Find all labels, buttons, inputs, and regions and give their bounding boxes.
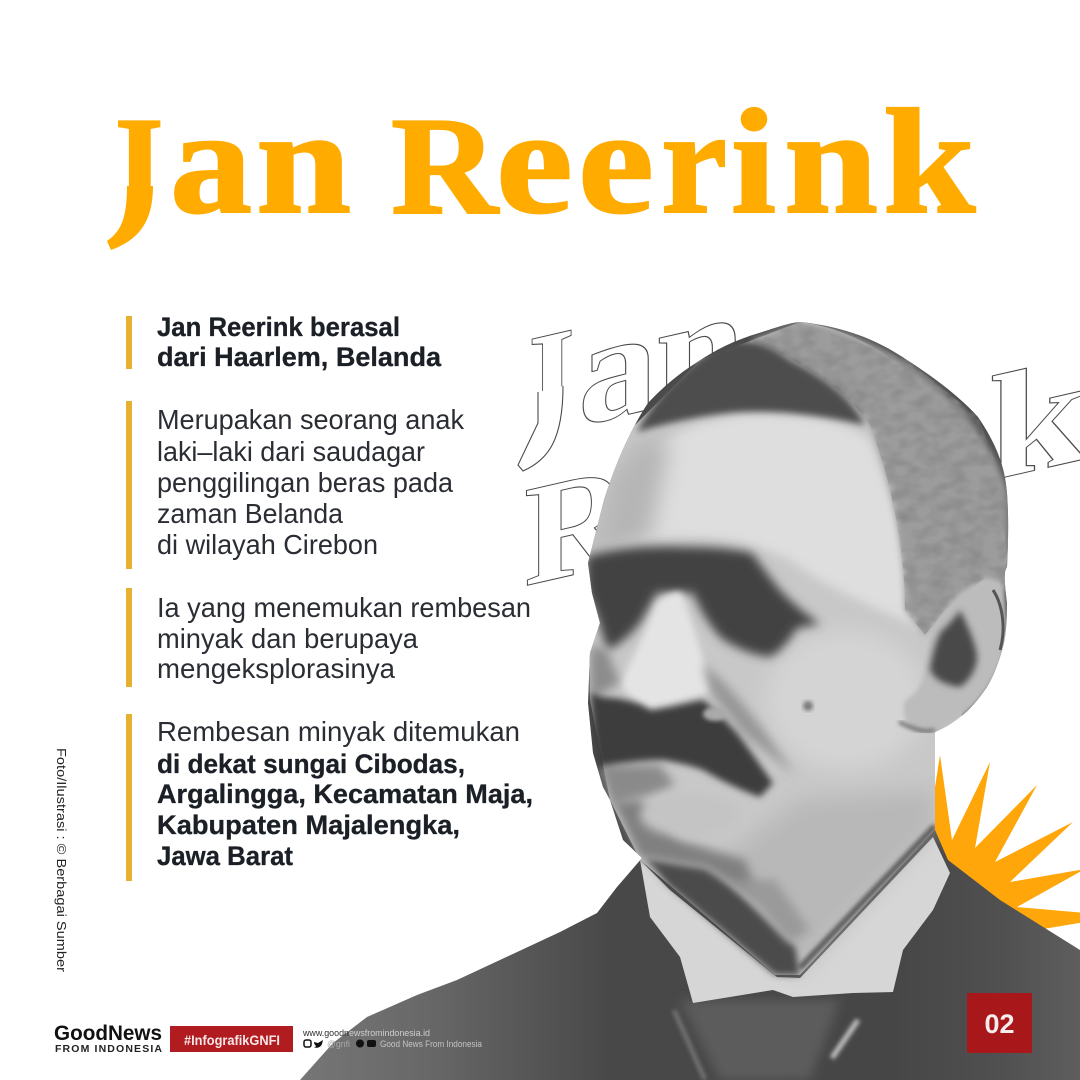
left cheek edge: [590, 645, 620, 700]
logo: FROM INDONESIA: [55, 1043, 162, 1055]
title: [107, 106, 976, 250]
bullet: location: Argalingga, Kecamatan Maja,: [157, 779, 533, 809]
neck: [720, 790, 935, 972]
outlined title behind portrait: a: [578, 275, 658, 459]
photo credit: Foto/Ilustrasi : © Berbagai Sumber: [54, 748, 69, 973]
website and social handles: @gnfi: [327, 1039, 350, 1049]
bullet: location: Kabupaten Majalengka,: [157, 810, 460, 840]
icon: orange sunburst: [933, 755, 1080, 930]
collar: [640, 837, 950, 1003]
logo: [54, 1022, 162, 1055]
outlined title behind portrait: J: [512, 295, 575, 475]
bullet: family background: zaman Belanda: [157, 498, 343, 529]
dark hairline: [637, 341, 865, 432]
outlined title behind portrait: n: [655, 255, 745, 441]
bullet: family background: penggilingan beras pada: [157, 467, 453, 498]
bullet: discovery: [126, 588, 531, 687]
title: R: [391, 90, 500, 244]
footer: [54, 1022, 482, 1055]
title: i: [731, 78, 776, 245]
title: e: [496, 80, 573, 245]
bullet: location: [126, 714, 533, 881]
hashtag badge: [170, 1026, 293, 1052]
chin highlight: [636, 803, 683, 841]
title: n: [784, 79, 878, 245]
face base: [588, 322, 1007, 975]
nostril and cheek shadow: [703, 665, 795, 775]
title: k: [883, 79, 975, 245]
website and social handles: [302, 1028, 482, 1049]
forehead: [643, 414, 914, 626]
bullet: discovery: minyak dan berupaya: [157, 623, 418, 654]
bullet: location: Rembesan minyak ditemukan: [157, 716, 520, 747]
bullet: location: Jawa Barat: [157, 841, 293, 871]
jacket: [290, 310, 1080, 1080]
bullet: origin: dari Haarlem, Belanda: [157, 342, 442, 372]
hashtag badge: #InfografikGNFI: [184, 1033, 280, 1048]
bullet: family background: laki–laki dari saudagar: [157, 436, 425, 467]
bullet: origin: Jan Reerink berasal: [157, 312, 400, 342]
title: J: [98, 90, 163, 244]
bullet: discovery: mengeksplorasinya: [157, 653, 395, 684]
eyebrow and eye socket: [586, 547, 820, 657]
logo: GoodNews: [54, 1022, 162, 1045]
portrait: [290, 310, 1080, 1080]
nose: [620, 592, 711, 710]
ear: [904, 580, 1007, 732]
bullet: family background: di wilayah Cirebon: [157, 529, 378, 560]
mole: [803, 701, 813, 711]
bullet: location: di dekat sungai Cibodas,: [157, 749, 465, 779]
website and social handles: Good News From Indonesia: [380, 1039, 482, 1049]
hair texture: [750, 322, 1008, 635]
title: a: [170, 78, 252, 244]
tie: [680, 1000, 840, 1080]
bullet: discovery: Ia yang menemukan rembesan: [157, 592, 531, 623]
bullet list: [126, 312, 533, 881]
under-chin shadow: [645, 858, 800, 975]
bullet: origin: [126, 312, 442, 372]
mustache: [590, 693, 773, 797]
page number: [967, 993, 1032, 1053]
website and social handles: www.goodnewsfromindonesia.id: [302, 1028, 430, 1038]
bullet: family background: [126, 401, 465, 569]
title: n: [256, 79, 351, 245]
page number: 02: [984, 1009, 1015, 1039]
outlined title behind portrait: [512, 255, 1080, 618]
cheek: [771, 636, 916, 764]
title: e: [578, 79, 654, 245]
title: r: [661, 80, 727, 245]
hair: [750, 322, 1010, 635]
outlined title behind portrait: R: [524, 432, 631, 618]
bullet: family background: Merupakan seorang anak: [157, 404, 465, 435]
